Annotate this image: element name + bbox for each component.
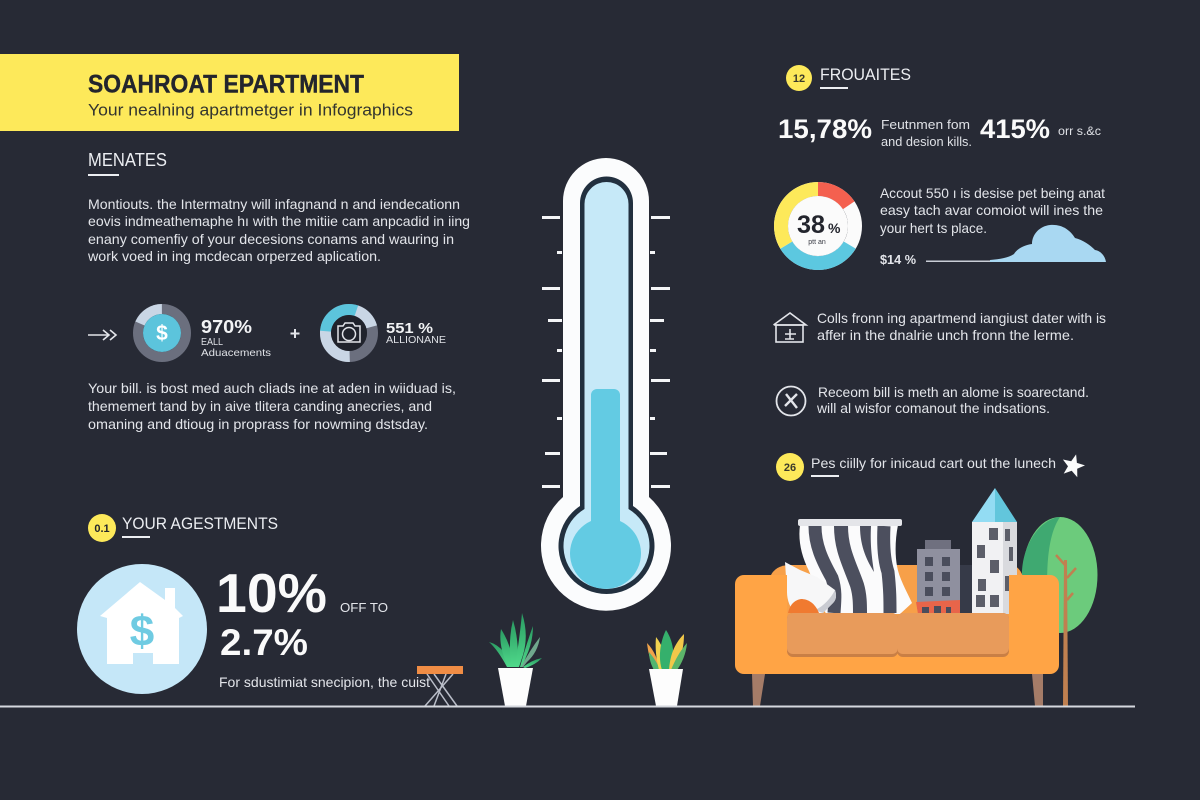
- plant: green: [489, 613, 542, 706]
- grey building: [916, 540, 960, 614]
- plant: yellow: [647, 630, 687, 706]
- icon: camera donut: [319, 303, 379, 363]
- text block: bill: Your bill. is bost med auch cliads ine at aden in wiiduad is,: [88, 380, 456, 396]
- icon: cloud: [990, 225, 1106, 262]
- stat label: and desion kills.: [881, 135, 972, 149]
- donut chart: 38%: 38: [797, 211, 825, 239]
- stat: 15,78%: 15,78%: [778, 114, 872, 144]
- panel: stats row: [88, 301, 446, 365]
- pillow: [785, 562, 836, 613]
- badge: [88, 514, 116, 542]
- icon: house with dollar: $: [130, 607, 154, 656]
- text block: recent: will al wisfor comanout the indsations.: [816, 400, 1050, 416]
- donut chart: 38%: %: [828, 220, 841, 236]
- sofa legs: [752, 674, 1043, 706]
- sofa arm: right: [1009, 575, 1059, 674]
- icon: star: [1063, 454, 1085, 477]
- seat cushion right: [897, 613, 1009, 657]
- mercury: [570, 389, 641, 589]
- stat: 514% with cloud: $14 %: [880, 253, 916, 267]
- stat: 970%: [201, 317, 271, 359]
- stat label: Feutnmen fom: [881, 118, 970, 132]
- heading: FROUAITES: [820, 65, 911, 84]
- text block: bill: thememert tand by in aive tlitera canding anecries, and: [88, 398, 432, 414]
- stool: [417, 666, 463, 706]
- text block: Montiouts. the Intermatny will infagnand n and iendecationn: [88, 196, 460, 212]
- stat: 2.7%: 2.7%: [220, 622, 308, 663]
- text block: account: your hert ts place.: [880, 220, 987, 236]
- panel: menates: [87, 150, 470, 264]
- text block: bill: [88, 380, 456, 432]
- text block: account: Accout 550 ı is desise pet being anat: [880, 185, 1105, 201]
- text block: recent: Receom bill is meth an alome is soarectand.: [818, 384, 1089, 400]
- text block: recent: [816, 384, 1089, 416]
- badge: [786, 65, 812, 91]
- heading: YOUR AGESTMENTS: [122, 514, 278, 533]
- stat: 514% with cloud: [880, 225, 1106, 267]
- donut chart: 38%: ptt an: [808, 239, 826, 246]
- icon: dollar donut: $: [156, 322, 168, 345]
- stat: 415%: 415%: [980, 114, 1050, 144]
- stat label: [881, 118, 972, 149]
- badge: [776, 453, 804, 481]
- stat: 970%: 970%: [201, 317, 252, 337]
- heading: MENATES: [88, 150, 167, 170]
- text block: account: [880, 185, 1105, 236]
- ground line: [0, 706, 1135, 708]
- thermometer: [541, 158, 671, 611]
- panel: callout 26: [776, 453, 1085, 481]
- sofa base: [780, 640, 1020, 674]
- glass outline: [558, 176, 654, 594]
- arrow: [88, 330, 116, 340]
- title: SOAHROAT EPARTMENT: [88, 70, 364, 98]
- stat: 970%: Aduacements: [201, 347, 271, 359]
- text: Pes ciilly for inicaud cart out the lunech: [811, 455, 1056, 471]
- stat: 551%: ALLIONANE: [386, 335, 446, 346]
- text block: [87, 196, 470, 264]
- text block: colls: affer in the dnalrie unch fronn the lerme.: [817, 327, 1074, 343]
- text block: account: easy tach avar comoiot will ines the: [880, 202, 1103, 218]
- ticks: [542, 216, 670, 488]
- tower: [972, 488, 1017, 614]
- badge: 12: [793, 73, 805, 85]
- stat: 551%: [386, 320, 446, 346]
- icon: dollar donut: [130, 301, 194, 365]
- seat cushion left: [787, 613, 898, 657]
- plus: [290, 329, 300, 338]
- striped curtain: [798, 519, 912, 614]
- stat: 10%: 10%: [216, 562, 327, 624]
- stat label: orr s.&c: [1058, 124, 1101, 138]
- icon: house with dollar: [77, 564, 207, 694]
- panel: frouaites: [778, 65, 1101, 149]
- sofa arm: left: [735, 575, 787, 674]
- text block: bill: omaning and dtioug in proprass for nowming dstsday.: [88, 416, 428, 432]
- badge: 26: [784, 462, 796, 474]
- tree: [1022, 517, 1098, 706]
- stat: 970%: EALL: [201, 337, 223, 348]
- city silhouette: [958, 565, 974, 615]
- label: off to: OFF TO: [340, 600, 388, 615]
- icon: circled tools: [776, 386, 806, 416]
- banner: title: [0, 54, 459, 131]
- sofa with items: [735, 488, 1059, 706]
- text block: enany comenfiy of your decesions conams and wauring in: [88, 231, 454, 247]
- subtitle: Your nealning apartmetger in Infographics: [88, 100, 413, 120]
- caption: For sdustimiat snecipion, the cuist: [219, 674, 430, 690]
- badge: 0.1: [94, 523, 110, 535]
- icon: house outline: [774, 313, 806, 342]
- glass fill: [563, 182, 649, 589]
- stat: 551%: 551 %: [386, 320, 433, 337]
- donut chart: 38%: [767, 175, 869, 277]
- panel: your agestments: [77, 514, 430, 694]
- text block: colls: Colls fronn ing apartmend iangiust dater with is: [817, 310, 1106, 326]
- text block: eovis indmeathemaphe hı with the mitiie cam anpcadid in iing: [88, 213, 470, 229]
- text block: work voed in ing mcdecan orperzed aplication.: [87, 248, 381, 264]
- sofa back: [770, 565, 1024, 620]
- text block: colls: [817, 310, 1106, 343]
- outer case: [541, 158, 671, 611]
